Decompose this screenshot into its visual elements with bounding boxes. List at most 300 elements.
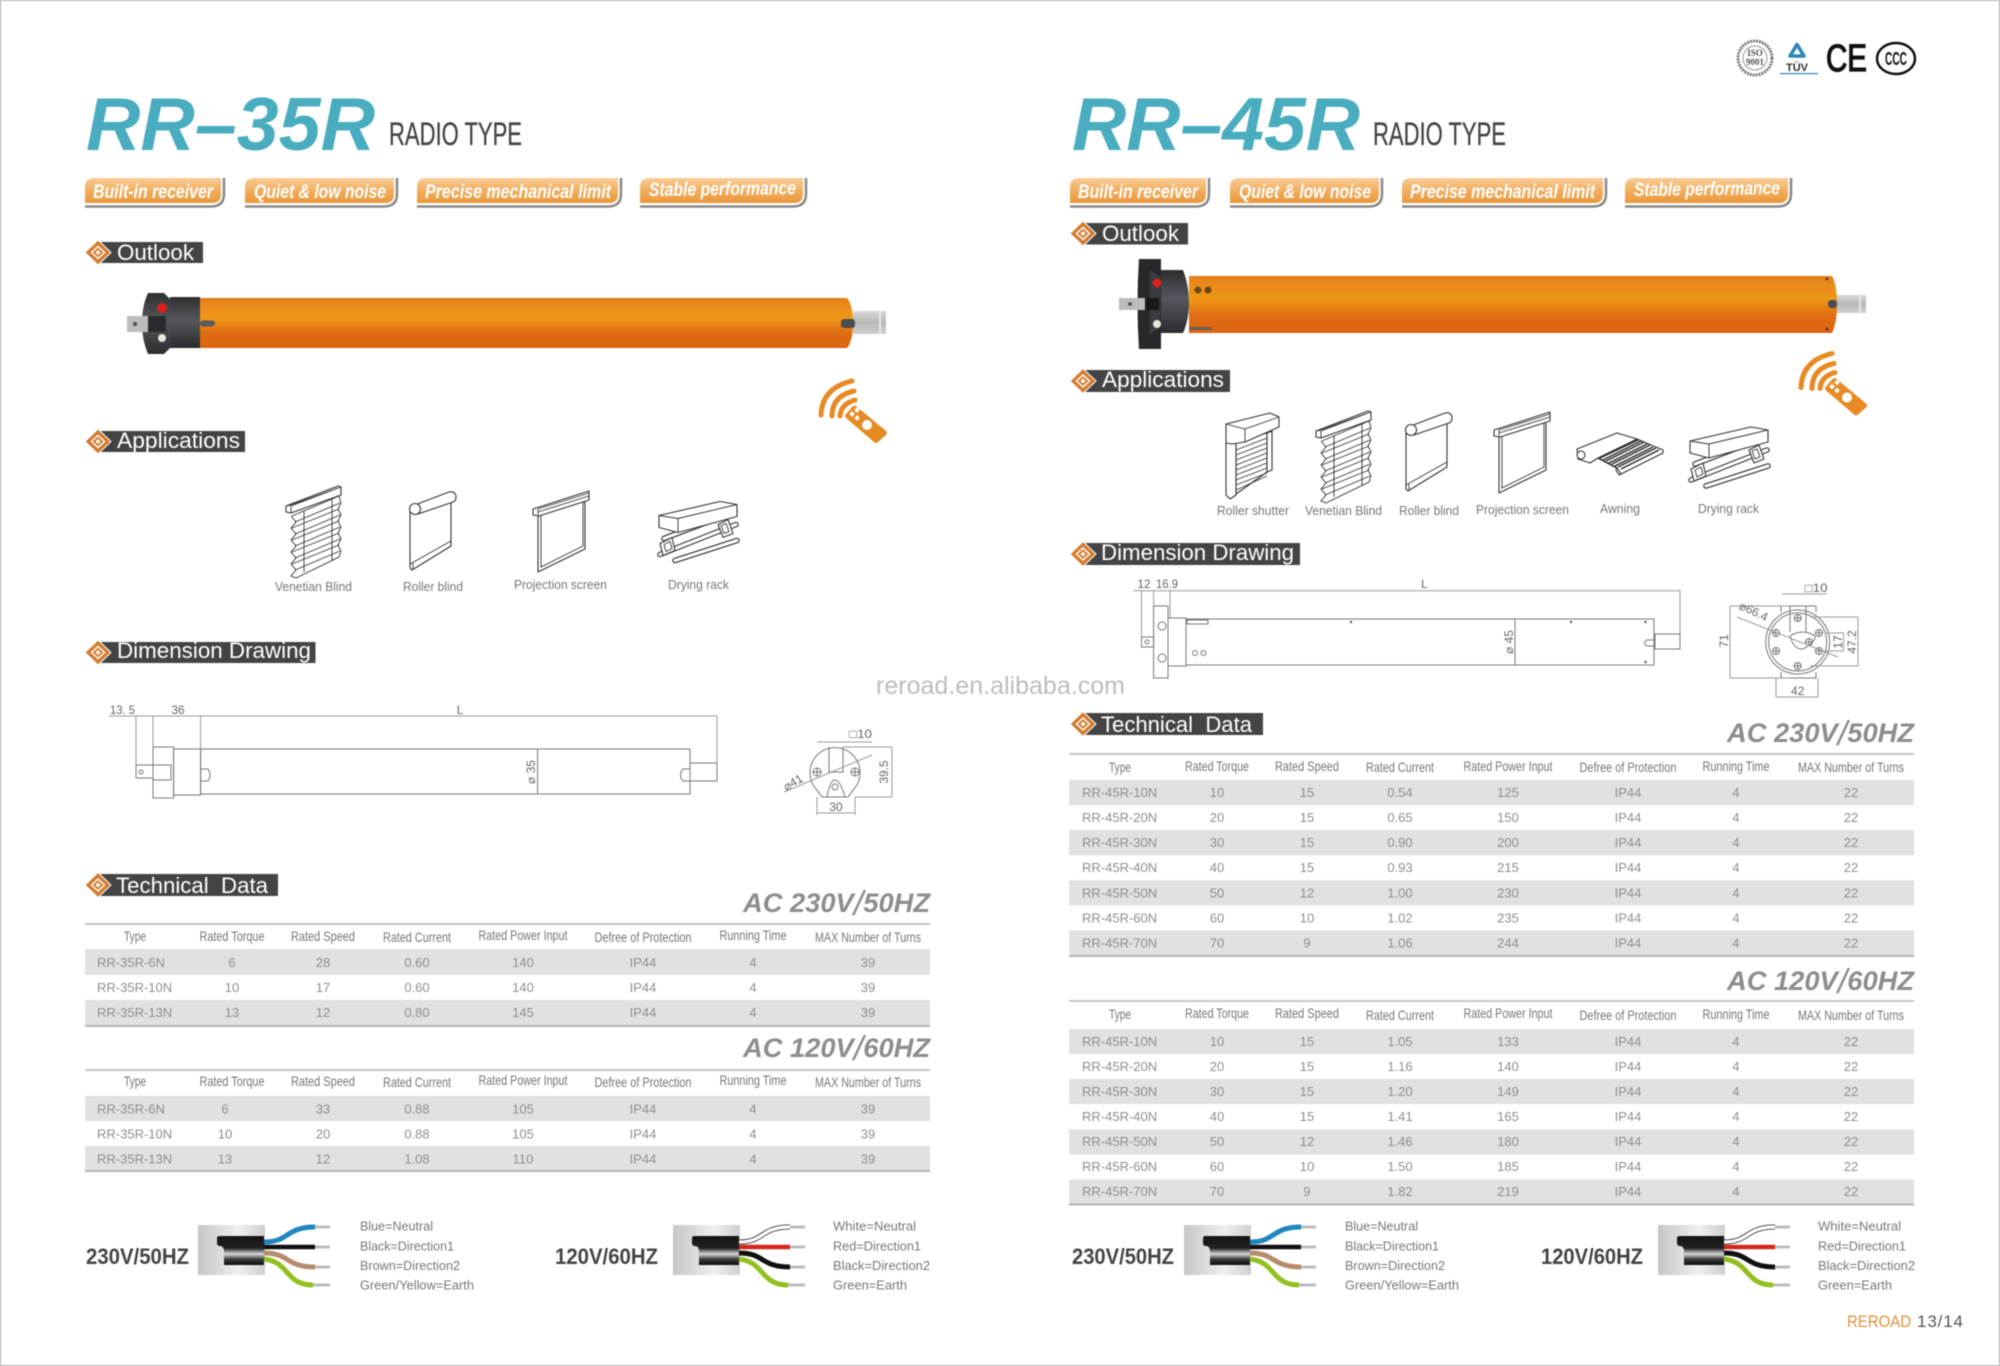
table title: /	[852, 1030, 867, 1068]
header row: Running Time	[720, 1072, 787, 1088]
table title: AC 120V	[743, 1033, 853, 1063]
row: 22	[1844, 860, 1858, 875]
icon: projection screen: Projection screen	[1476, 503, 1569, 517]
row: 6	[221, 1102, 229, 1116]
header row: Rated Torque	[1185, 1005, 1249, 1021]
row: 20	[1210, 810, 1224, 825]
heading: Technical Data (RR-45R): Technical Data	[1101, 712, 1253, 737]
header row: Defree of Protection	[594, 929, 692, 945]
wiring: RR-45R 120V/60HZ: Green=Earth	[1818, 1278, 1892, 1292]
table title: /	[1836, 715, 1851, 753]
heading: Outlook (RR-35R): Outlook	[117, 240, 195, 265]
row: 4	[1732, 910, 1740, 926]
row: 22	[1844, 1084, 1858, 1099]
dimension drawing: RR-45R end view: 47.2	[1845, 630, 1859, 654]
icon: CE mark: CE	[1826, 38, 1867, 80]
row: 1.46	[1387, 1134, 1413, 1149]
row: 6	[228, 955, 236, 970]
row: IP44	[630, 1102, 656, 1116]
table: RR-45R AC 230V/50HZ	[1069, 715, 1916, 957]
row: 10	[225, 980, 239, 995]
row: 15	[1300, 1084, 1314, 1099]
dimension drawing: RR-45R end view	[1717, 581, 1859, 698]
heading: Applications (RR-45R)	[1070, 367, 1230, 394]
header row: Type	[1109, 1006, 1131, 1022]
row	[1082, 1134, 1858, 1149]
row: 125	[1497, 785, 1519, 800]
heading: Applications (RR-45R): Applications	[1102, 367, 1224, 392]
row: IP44	[1615, 1084, 1641, 1099]
wiring: RR-45R 120V/60HZ: 120V/60HZ	[1541, 1244, 1643, 1269]
feature badges: RR-35R: Precise mechanical limit	[425, 182, 612, 203]
row: RR-45R-60N	[1082, 910, 1157, 926]
row: 0.60	[404, 980, 430, 995]
row: 0.60	[404, 955, 430, 970]
row: RR-35R-10N	[97, 1126, 172, 1142]
row: 244	[1497, 936, 1519, 950]
row: 15	[1300, 1034, 1314, 1049]
header row	[1109, 758, 1904, 775]
header row: MAX Number of Turns	[1798, 759, 1904, 775]
row: RR-45R-30N	[1082, 1084, 1157, 1099]
page number: 13/14	[1917, 1312, 1963, 1331]
dimension drawing: RR-45R side view	[1134, 577, 1680, 678]
icon: TUV	[1780, 44, 1818, 74]
row: 70	[1210, 1184, 1224, 1199]
row: 4	[1732, 810, 1740, 825]
row: 0.90	[1387, 835, 1413, 850]
heading: Technical Data (RR-35R): Technical Data	[116, 873, 269, 898]
wiring: RR-35R 120V/60HZ: 120V/60HZ	[555, 1244, 658, 1269]
row: IP44	[1615, 1059, 1641, 1074]
row: 4	[1732, 785, 1740, 800]
icon: roller shutter: Roller shutter	[1217, 504, 1289, 518]
row: 4	[749, 1126, 757, 1142]
icon: venetian blind	[1305, 411, 1382, 518]
wiring: RR-45R 120V/60HZ: Black=Direction2	[1818, 1259, 1915, 1273]
dimension drawing: RR-45R end view: □10	[1805, 581, 1828, 595]
row: 105	[512, 1102, 534, 1116]
row: 1.00	[1387, 886, 1413, 900]
dimension drawing: RR-35R end view: 39.5	[877, 760, 891, 784]
row: 165	[1497, 1109, 1519, 1124]
row: 4	[749, 1152, 757, 1166]
row	[1082, 910, 1858, 926]
row: 22	[1844, 936, 1858, 950]
row: 40	[1210, 1109, 1224, 1124]
table title: AC 230V	[1727, 718, 1837, 748]
row	[1082, 1184, 1858, 1199]
icon: venetian blind	[275, 486, 352, 594]
row	[1082, 1084, 1858, 1099]
dimension drawing: RR-45R end view: 71	[1717, 634, 1731, 648]
table: RR-35R AC 120V/60HZ	[85, 1030, 932, 1172]
row: 4	[1732, 886, 1740, 900]
row: 0.80	[404, 1005, 430, 1020]
row: 12	[1300, 886, 1314, 900]
header row: Rated Speed	[1275, 758, 1339, 774]
row: 4	[1732, 1109, 1740, 1124]
row	[97, 980, 875, 995]
wiring: RR-35R 230V/50HZ: Black=Direction1	[360, 1240, 454, 1254]
row: 4	[1732, 1159, 1740, 1174]
watermark: reroad.en.alibaba.com	[876, 672, 1125, 700]
header row: Rated Current	[383, 1074, 451, 1090]
row: 22	[1844, 1159, 1858, 1174]
row: 4	[749, 955, 757, 970]
row: IP44	[1615, 936, 1641, 950]
heading: Dimension Drawing (RR-35R): Dimension Drawing	[117, 638, 311, 663]
row: 4	[749, 1102, 757, 1116]
row: 4	[1732, 1034, 1740, 1049]
table title: /	[1836, 963, 1851, 1001]
row: 13	[225, 1005, 239, 1020]
header row: Rated Torque	[1185, 758, 1249, 774]
row: 22	[1844, 1184, 1858, 1199]
certification logos	[1738, 38, 1915, 80]
wiring: RR-35R 120V/60HZ: Red=Direction1	[833, 1240, 921, 1254]
row: 30	[1210, 835, 1224, 850]
row: 1.06	[1387, 936, 1413, 950]
row: 22	[1844, 1109, 1858, 1124]
row: IP44	[1615, 835, 1641, 850]
header row: Rated Power Input	[478, 927, 568, 943]
row: 12	[1300, 1134, 1314, 1149]
row: 39	[861, 1152, 875, 1166]
row: IP44	[630, 1152, 656, 1166]
header row	[124, 927, 921, 945]
icon: roller shutter	[1217, 413, 1289, 518]
icon: CCC mark: CCC	[1885, 49, 1907, 69]
row: 22	[1844, 886, 1858, 900]
row	[97, 1005, 875, 1020]
motor photo: RR-45R tubular motor	[1119, 259, 1866, 349]
row: 10	[1300, 910, 1314, 926]
icon: roller blind	[1399, 413, 1459, 518]
row: 4	[1732, 1084, 1740, 1099]
title: RR-45R radio type: RADIO TYPE	[1373, 116, 1506, 152]
row	[1082, 1034, 1858, 1049]
wiring: RR-35R 120V/60HZ: Green=Earth	[833, 1278, 907, 1292]
icon: CCC mark	[1877, 43, 1915, 74]
title: RR-35R radio type: RADIO TYPE	[389, 116, 522, 152]
icon: venetian blind: Venetian Blind	[275, 580, 352, 594]
row: 215	[1497, 860, 1519, 875]
dimension drawing: RR-45R end view: 42	[1791, 684, 1805, 698]
wiring: RR-45R 230V/50HZ	[1072, 1220, 1459, 1292]
row: RR-35R-6N	[97, 955, 165, 970]
dimension drawing: RR-45R side view: 16.9	[1156, 577, 1178, 591]
header row: MAX Number of Turns	[1798, 1007, 1904, 1023]
row: 10	[1300, 1159, 1314, 1174]
row: RR-45R-60N	[1082, 1159, 1157, 1174]
header row: Defree of Protection	[1580, 1007, 1676, 1023]
application icons: RR-45R	[1217, 411, 1768, 518]
feature badges: RR-35R: Quiet & low noise	[254, 182, 386, 203]
wiring: RR-45R 230V/50HZ: 230V/50HZ	[1072, 1244, 1174, 1269]
header row: Rated Speed	[1275, 1005, 1339, 1021]
row: 15	[1300, 860, 1314, 875]
icon: ISO 9001	[1738, 41, 1772, 75]
row: 1.41	[1387, 1109, 1413, 1124]
row: 4	[1732, 860, 1740, 875]
icon: roller blind: Roller blind	[403, 580, 463, 594]
row: IP44	[1615, 860, 1641, 875]
table title: 50HZ	[1847, 718, 1916, 748]
feature badges: RR-45R: Precise mechanical limit	[1410, 182, 1596, 203]
icon: drying rack: Drying rack	[668, 578, 730, 592]
icon: venetian blind: Venetian Blind	[1305, 504, 1382, 518]
row: 0.65	[1387, 810, 1413, 825]
row: 4	[1732, 1059, 1740, 1074]
row: IP44	[1615, 810, 1641, 825]
row: RR-45R-20N	[1082, 1059, 1157, 1074]
row: 22	[1844, 835, 1858, 850]
row: 140	[512, 955, 534, 970]
row: 4	[1732, 1134, 1740, 1149]
icon: roller blind: Roller blind	[1399, 504, 1459, 518]
dimension drawing: RR-35R end view: □10	[849, 727, 872, 741]
row: 20	[1210, 1059, 1224, 1074]
row: RR-45R-30N	[1082, 835, 1157, 850]
icon: ISO 9001: 9001	[1746, 57, 1764, 67]
feature badges: RR-45R: Quiet & low noise	[1239, 182, 1371, 203]
icon: projection screen	[514, 491, 607, 592]
dimension drawing: RR-35R end view	[781, 727, 892, 815]
row: IP44	[1615, 1184, 1641, 1199]
row: 13	[218, 1152, 232, 1166]
row: IP44	[630, 955, 656, 970]
wiring: RR-35R 120V/60HZ: Black=Direction2	[833, 1259, 930, 1273]
header row: Running Time	[1702, 1006, 1770, 1022]
header row: Running Time	[720, 927, 787, 943]
icon: drying rack	[1690, 427, 1768, 516]
row: 15	[1300, 1059, 1314, 1074]
wiring: RR-35R 120V/60HZ	[555, 1220, 930, 1292]
header row: Type	[124, 928, 146, 944]
header row: MAX Number of Turns	[815, 1074, 921, 1090]
row	[97, 1126, 875, 1142]
header row	[124, 1072, 921, 1090]
wiring: RR-45R 230V/50HZ: Green/Yellow=Earth	[1345, 1278, 1459, 1292]
row: 22	[1844, 785, 1858, 800]
row: 105	[512, 1126, 534, 1142]
row: 4	[1732, 835, 1740, 850]
header row: Rated Torque	[200, 1073, 265, 1089]
header row: Defree of Protection	[594, 1074, 692, 1090]
title: RR-35R radio type: RR–35R	[86, 82, 375, 166]
row: 0.88	[404, 1102, 430, 1116]
table title: 60HZ	[1847, 966, 1916, 996]
dimension drawing: RR-35R side view: L	[457, 703, 464, 717]
row: 0.93	[1387, 860, 1413, 875]
row: IP44	[1615, 886, 1641, 900]
row: RR-45R-50N	[1082, 886, 1157, 900]
row: 4	[1732, 1184, 1740, 1199]
icon: drying rack	[659, 502, 737, 592]
feature badges: RR-45R	[1070, 178, 1791, 206]
page number	[1847, 1312, 1963, 1331]
heading: Applications (RR-35R): Applications	[117, 428, 240, 453]
row: 235	[1497, 910, 1519, 926]
header row: Type	[1109, 759, 1131, 775]
row: IP44	[1615, 1034, 1641, 1049]
header row: Rated Speed	[291, 1073, 355, 1089]
dimension drawing: RR-35R side view: ⌀ 35	[524, 760, 538, 784]
row: 50	[1210, 886, 1224, 900]
row: RR-45R-50N	[1082, 1134, 1157, 1149]
row: IP44	[1615, 910, 1641, 926]
row: RR-35R-10N	[97, 980, 172, 995]
row: 39	[861, 980, 875, 995]
row: 1.20	[1387, 1084, 1413, 1099]
row	[1082, 810, 1858, 825]
icon: awning: Awning	[1600, 502, 1640, 516]
row: 0.88	[404, 1126, 430, 1142]
row: 22	[1844, 1034, 1858, 1049]
dimension drawing: RR-35R side view	[109, 703, 717, 798]
row: RR-45R-20N	[1082, 810, 1157, 825]
dimension drawing: RR-35R side view: 36	[171, 703, 185, 717]
row: 180	[1497, 1134, 1519, 1149]
header row: Rated Current	[1366, 759, 1434, 775]
row: 133	[1497, 1034, 1519, 1049]
wiring: RR-45R 230V/50HZ: Blue=Neutral	[1345, 1220, 1418, 1234]
title: RR-45R radio type: RR–45R	[1072, 82, 1360, 166]
heading: Outlook (RR-45R)	[1070, 221, 1188, 246]
wiring: RR-45R 230V/50HZ: Brown=Direction2	[1345, 1259, 1445, 1273]
row: 22	[1844, 1134, 1858, 1149]
wiring: RR-35R 230V/50HZ: Blue=Neutral	[360, 1220, 433, 1234]
row	[97, 1102, 875, 1116]
table title: 50HZ	[863, 888, 932, 918]
row: 12	[316, 1152, 330, 1166]
header row: Rated Power Input	[478, 1072, 568, 1088]
wiring: RR-45R 120V/60HZ: White=Neutral	[1818, 1220, 1901, 1234]
row: 15	[1300, 785, 1314, 800]
title: RR-35R radio type	[86, 82, 522, 166]
page number: REROAD	[1847, 1312, 1911, 1331]
row	[1082, 860, 1858, 875]
application icons: RR-35R	[275, 486, 737, 594]
row: RR-45R-10N	[1082, 785, 1157, 800]
heading: Outlook (RR-35R)	[85, 240, 203, 265]
icon: projection screen: Projection screen	[514, 578, 607, 592]
header row: Rated Speed	[291, 928, 355, 944]
table title: /	[852, 885, 867, 923]
row: 200	[1497, 835, 1519, 850]
row: 140	[1497, 1059, 1519, 1074]
wiring: RR-45R 120V/60HZ	[1541, 1220, 1915, 1292]
icon: projection screen	[1476, 412, 1569, 517]
row: IP44	[1615, 785, 1641, 800]
row	[1082, 835, 1858, 850]
wiring: RR-35R 230V/50HZ: Green/Yellow=Earth	[360, 1278, 474, 1292]
row: 1.16	[1387, 1059, 1413, 1074]
row: 110	[513, 1152, 533, 1166]
row: 10	[1210, 785, 1224, 800]
wiring: RR-45R 120V/60HZ: Red=Direction1	[1818, 1240, 1906, 1254]
dimension drawing: RR-35R end view: 30	[829, 800, 843, 814]
row: 15	[1300, 810, 1314, 825]
row: 39	[861, 1005, 875, 1020]
wiring: RR-35R 120V/60HZ: White=Neutral	[833, 1220, 916, 1234]
row: 20	[316, 1126, 330, 1142]
header row	[1109, 1005, 1904, 1023]
icon: remote control (RR-45R)	[1801, 354, 1867, 416]
table title: AC 120V	[1727, 966, 1837, 996]
row: 60	[1210, 910, 1224, 926]
feature badges: RR-45R: Stable performance	[1634, 178, 1780, 201]
row	[1082, 1059, 1858, 1074]
feature badges: RR-35R: Stable performance	[649, 178, 796, 201]
dimension drawing: RR-35R side view: 13. 5	[110, 703, 135, 717]
title: RR-45R radio type	[1072, 82, 1506, 166]
row: 50	[1210, 1134, 1224, 1149]
feature badges: RR-35R	[85, 178, 806, 206]
row	[1082, 785, 1858, 800]
row	[1082, 1159, 1858, 1174]
header row: MAX Number of Turns	[815, 929, 921, 945]
row: 33	[316, 1102, 330, 1116]
row: IP44	[630, 1005, 656, 1020]
icon: drying rack: Drying rack	[1698, 502, 1760, 516]
row: 1.08	[404, 1152, 430, 1166]
row	[97, 955, 875, 970]
row: 1.05	[1387, 1034, 1413, 1049]
row: IP44	[630, 1126, 656, 1142]
wiring: RR-45R 230V/50HZ: Black=Direction1	[1345, 1240, 1439, 1254]
row: 70	[1210, 936, 1224, 950]
row: 150	[1497, 810, 1519, 825]
table title: AC 230V	[743, 888, 853, 918]
row: 4	[749, 980, 757, 995]
row: 12	[316, 1005, 330, 1020]
row: 40	[1210, 860, 1224, 875]
row: 15	[1300, 835, 1314, 850]
dimension drawing: RR-45R side view: 12	[1137, 577, 1151, 591]
row	[1082, 1109, 1858, 1124]
row	[97, 1152, 875, 1166]
row: 22	[1844, 1059, 1858, 1074]
row: IP44	[1615, 1159, 1641, 1174]
header row: Rated Power Input	[1464, 758, 1553, 774]
dimension drawing: RR-35R end view: ⌀41	[781, 771, 806, 794]
row: 28	[316, 955, 330, 970]
row	[1082, 886, 1858, 900]
header row: Rated Current	[1366, 1007, 1434, 1023]
row: 140	[512, 980, 534, 995]
icon: remote control (RR-35R)	[821, 381, 887, 443]
feature badges: RR-35R: Built-in receiver	[93, 182, 214, 203]
row: RR-35R-13N	[97, 1152, 172, 1166]
icon: TUV: TÜV	[1786, 61, 1809, 74]
row: 0.54	[1387, 785, 1413, 800]
row: 39	[861, 955, 875, 970]
row: 1.50	[1387, 1159, 1413, 1174]
row: 4	[749, 1005, 757, 1020]
row: 4	[1732, 936, 1740, 950]
wiring: RR-35R 230V/50HZ: Brown=Direction2	[360, 1259, 460, 1273]
header row: Rated Torque	[200, 928, 265, 944]
row: IP44	[630, 980, 656, 995]
row: 15	[1300, 1109, 1314, 1124]
header row: Running Time	[1702, 758, 1770, 774]
header row: Type	[124, 1073, 146, 1089]
heading: Dimension Drawing (RR-45R): Dimension Drawing	[1101, 540, 1294, 565]
row: 185	[1497, 1159, 1519, 1174]
dimension drawing: RR-45R end view: ⌀66.4	[1737, 599, 1771, 624]
